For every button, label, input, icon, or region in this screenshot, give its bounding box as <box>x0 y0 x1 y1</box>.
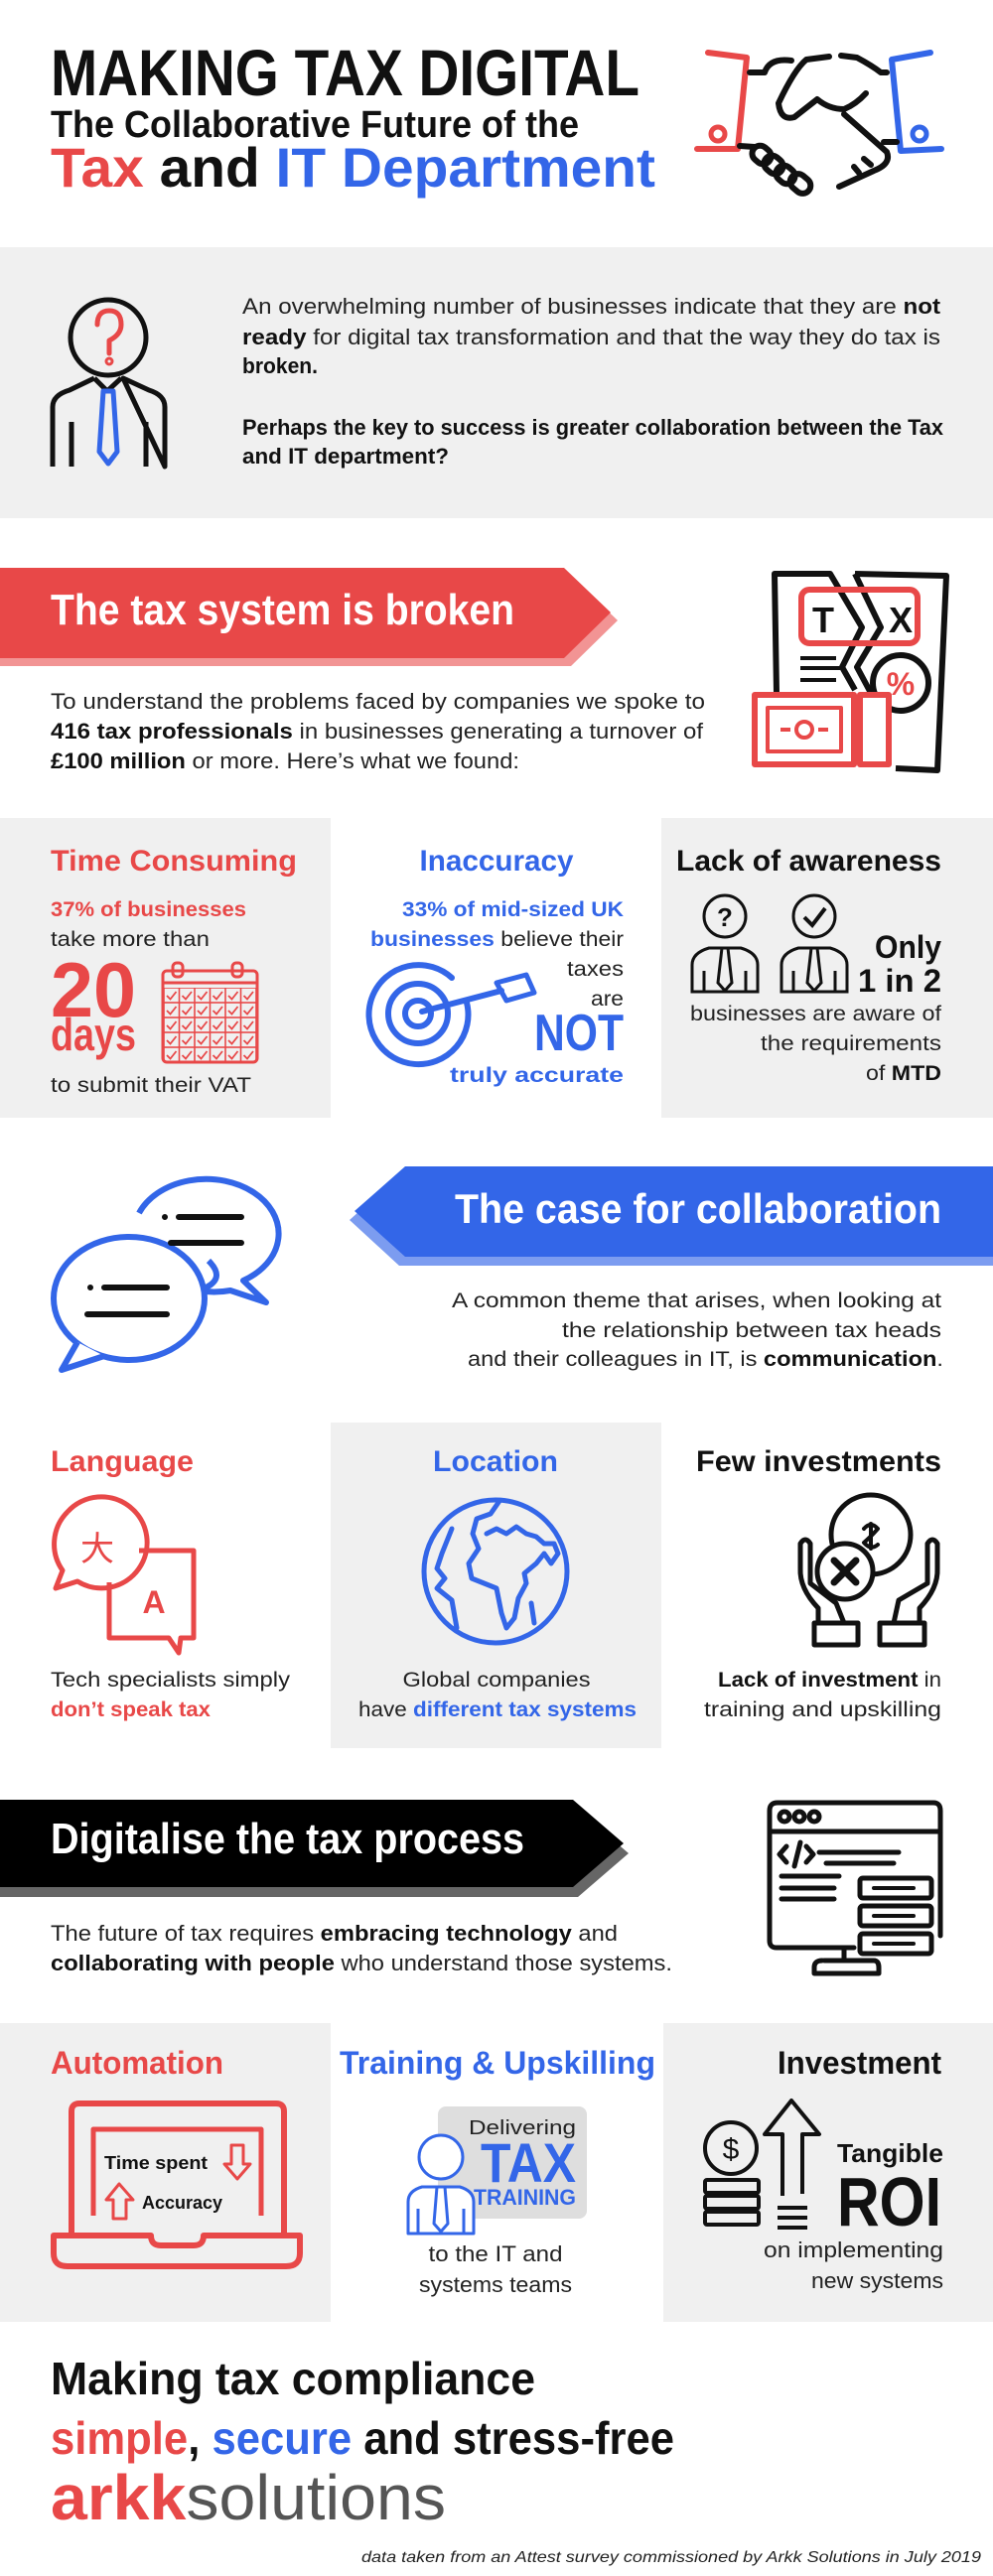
panel: location: have different tax systems <box>358 1698 637 1721</box>
panel: few investments <box>696 1445 941 1721</box>
panel: time consuming: take more than <box>51 928 210 951</box>
panel: investment: Tangible <box>837 2138 943 2168</box>
panel: inaccuracy <box>368 845 624 1087</box>
panel: investment: new systems <box>811 2268 943 2293</box>
panel: time consuming: 37% of businesses <box>51 898 246 921</box>
panel: inaccuracy: 33% of mid-sized UK <box>402 898 624 921</box>
title <box>51 36 655 199</box>
banner: digitalise the tax process <box>0 1800 629 1897</box>
text: survey intro: 416 tax professionals in businesses generating a turnover of <box>51 719 704 744</box>
icon: calendar <box>163 963 257 1062</box>
icon: broken tax document <box>755 574 946 770</box>
icon: laptop <box>54 2103 300 2266</box>
text: future of tax paragraph: collaborating with people who understand those systems. <box>51 1951 672 1975</box>
icon: speech bubbles <box>54 1179 279 1370</box>
banner: the tax system is broken: The tax system is broken <box>51 586 514 634</box>
icon: translation bubbles: A <box>142 1584 166 1620</box>
icon: globe <box>424 1500 567 1643</box>
title: Tax and IT Department <box>51 136 655 199</box>
text: survey intro: To understand the problems faced by companies we spoke to <box>51 689 705 714</box>
text: future of tax paragraph <box>51 1921 672 1975</box>
panel: investment <box>663 2023 993 2322</box>
callout: delivering tax training: TRAINING <box>474 2185 576 2210</box>
panel: lack of awareness: 1 in 2 <box>858 963 941 999</box>
text: communication paragraph: and their colleagues in IT, is communication . <box>468 1348 943 1371</box>
text: intro paragraph: An overwhelming number of businesses indicate that they are not <box>242 294 941 319</box>
text: intro paragraph: ready for digital tax transformation and that the way they do tax is <box>242 325 940 349</box>
icon: translation bubbles <box>55 1497 194 1653</box>
panel: time consuming: 20 <box>51 946 136 1033</box>
panel: investment: Investment <box>778 2045 941 2081</box>
banner: the tax system is broken <box>0 568 618 666</box>
panel: investment: on implementing <box>764 2237 943 2262</box>
text: communication paragraph: A common theme that arises, when looking at <box>452 1289 941 1312</box>
panel: automation: Time spent <box>104 2153 208 2173</box>
tagline: Making tax compliance <box>51 2353 535 2404</box>
icon: coins and arrow <box>705 2101 819 2228</box>
icon: coins and arrow: $ <box>723 2133 740 2166</box>
footer note: data taken from an Attest survey commissioned by Arkk Solutions in July 2019 <box>361 2549 981 2566</box>
panel: language: don’t speak tax <box>51 1698 211 1721</box>
text: intro paragraph: broken. <box>242 353 318 378</box>
panel: inaccuracy: Inaccuracy <box>419 845 574 878</box>
panel: automation: Accuracy <box>142 2193 222 2213</box>
panel: lack of awareness: the requirements <box>761 1032 941 1055</box>
text: communication paragraph <box>452 1289 943 1371</box>
panel: training & upskilling: Training & Upskilling <box>340 2045 655 2081</box>
callout: delivering tax training <box>438 2106 587 2219</box>
panel: automation <box>0 2023 331 2322</box>
panel: language: Tech specialists simply <box>51 1669 291 1692</box>
icon: two people: ? <box>717 902 733 932</box>
panel: training & upskilling: to the IT and <box>429 2241 562 2266</box>
text: intro paragraph <box>242 294 944 469</box>
banner: the case for collaboration: The case for collaboration <box>455 1185 941 1232</box>
panel: lack of awareness: Only <box>875 929 941 965</box>
icon: broken tax document: % <box>887 666 915 702</box>
callout: delivering tax training: Delivering <box>469 2117 576 2139</box>
icon: broken tax document: X <box>889 600 913 640</box>
tagline: simple, secure and stress-free <box>51 2412 674 2464</box>
panel: time consuming: to submit their VAT <box>51 1074 251 1097</box>
panel: automation: Automation <box>51 2045 223 2081</box>
panel: lack of awareness: Lack of awareness <box>676 845 941 878</box>
panel: investment: ROI <box>837 2163 941 2240</box>
panel: language <box>51 1445 291 1721</box>
panel: training & upskilling: systems teams <box>419 2272 572 2297</box>
panel: inaccuracy: businesses believe their <box>370 928 624 951</box>
text: future of tax paragraph: The future of tax requires embracing technology and <box>51 1921 618 1946</box>
banner: digitalise the tax process: Digitalise the tax process <box>51 1815 524 1863</box>
panel: time consuming: Time Consuming <box>51 845 297 878</box>
panel: inaccuracy: are <box>591 988 624 1011</box>
title: The Collaborative Future of the <box>51 104 579 146</box>
panel: inaccuracy: NOT <box>534 1005 624 1062</box>
icon: handshake <box>697 53 941 197</box>
panel: training & upskilling <box>340 2045 655 2297</box>
title: MAKING TAX DIGITAL <box>51 36 639 109</box>
panel: location: Global companies <box>403 1669 590 1692</box>
panel: time consuming: days <box>51 1009 136 1060</box>
panel: lack of awareness <box>661 818 993 1118</box>
text: survey intro <box>51 689 705 773</box>
panel: location: Location <box>433 1445 558 1478</box>
icon: broken tax document: T <box>812 600 834 640</box>
text: intro paragraph: and IT department? <box>242 444 449 469</box>
panel: lack of awareness: of MTD <box>866 1062 941 1085</box>
panel: few investments: training and upskilling <box>704 1698 941 1721</box>
text: intro paragraph: Perhaps the key to success is greater collaboration between the Tax <box>242 415 944 440</box>
panel: language: Language <box>51 1445 194 1478</box>
icon: two people <box>692 895 847 992</box>
panel: few investments: Few investments <box>696 1445 941 1478</box>
panel: inaccuracy: taxes <box>567 958 624 981</box>
icon: hands with coin <box>800 1495 937 1645</box>
icon: person with question mark <box>53 300 165 467</box>
panel: time consuming <box>0 818 331 1118</box>
panel: few investments: Lack of investment in <box>718 1669 941 1692</box>
banner: the case for collaboration <box>350 1166 993 1266</box>
logo: arkk solutions: arkksolutions <box>51 2462 446 2533</box>
icon: translation bubbles: 大 <box>80 1531 114 1568</box>
panel: lack of awareness: businesses are aware of <box>690 1003 941 1025</box>
icon: trainer person <box>408 2135 474 2234</box>
text: communication paragraph: the relationship between tax heads <box>562 1319 941 1342</box>
text: survey intro: £100 million or more. Here’s what we found: <box>51 748 519 773</box>
panel: intro <box>0 247 993 518</box>
callout: delivering tax training: TAX <box>481 2131 576 2194</box>
icon: target <box>368 965 534 1064</box>
icon: monitor with code <box>770 1803 940 1973</box>
panel: location <box>331 1423 661 1748</box>
panel: inaccuracy: truly accurate <box>450 1064 624 1087</box>
tagline <box>51 2353 674 2464</box>
